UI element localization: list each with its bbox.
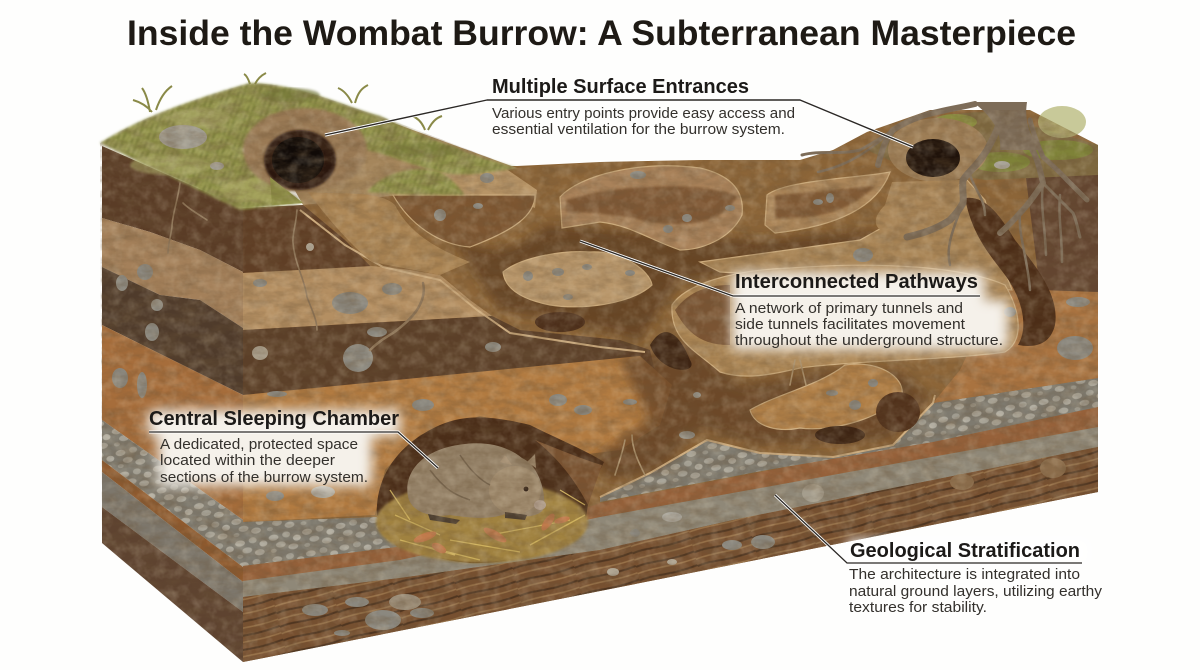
description: sections of the burrow system. (160, 469, 368, 486)
slab F (750, 364, 902, 429)
callout: interconnected pathways (580, 241, 1008, 350)
chamber cavity (377, 417, 604, 563)
front face soil layers (243, 110, 1098, 662)
description: The architecture is integrated into (849, 566, 1080, 583)
pale ridge lines along tunnel walls (300, 210, 935, 497)
slab B (560, 166, 742, 250)
description: essential ventilation for the burrow system. (492, 121, 785, 138)
description: textures for stability. (849, 599, 987, 616)
heading: Multiple Surface Entrances (492, 76, 749, 98)
description: natural ground layers, utilizing earthy (849, 583, 1103, 600)
right deep tunnel (965, 198, 1056, 346)
slope below right entrance (876, 180, 962, 238)
description: A dedicated, protected space (160, 436, 358, 453)
tree roots (802, 102, 1087, 290)
pebbles and stones (112, 125, 1093, 636)
illustration: burrow cross-section block (100, 73, 1100, 665)
leader line (775, 495, 1082, 563)
slab C (765, 172, 890, 233)
heading: Geological Stratification (850, 540, 1080, 562)
description: A network of primary tunnels and (735, 300, 963, 317)
right surface with tree roots and entrance (802, 102, 1098, 290)
callout: multiple surface entrances (325, 76, 913, 147)
description: side tunnels facilitates movement (735, 316, 966, 333)
grass-covered surface (100, 73, 517, 210)
texture overlay (100, 80, 1100, 665)
leader line (149, 432, 438, 468)
dark cavern shadows between tunnels (450, 225, 930, 480)
tan lip of slab A (380, 167, 537, 208)
rock slabs and pathways (308, 166, 1018, 444)
thin roots in soil (168, 183, 806, 475)
small dark burrow holes (650, 332, 692, 370)
central sleeping chamber (376, 417, 604, 563)
leaves (412, 512, 571, 555)
description: Various entry points provide easy access and (492, 105, 795, 122)
slab A (393, 195, 535, 247)
title: Inside the Wombat Burrow: A Subterranean Masterpiece (127, 14, 1076, 53)
grass and fern patches (867, 112, 1098, 180)
slab E: large tunnel island (672, 265, 1018, 376)
leader lines (325, 100, 913, 147)
description: throughout the underground structure. (735, 332, 1003, 349)
right entrance hole (906, 139, 960, 177)
heading: Interconnected Pathways (735, 271, 978, 293)
left face soil layers (102, 146, 243, 662)
slope below left entrance (308, 192, 470, 275)
leader line (580, 241, 980, 296)
callout: geological stratification (775, 495, 1103, 616)
heading: Central Sleeping Chamber (149, 408, 399, 430)
icon: left surface entrance hole (243, 108, 367, 205)
pale ledge and ridge at right (700, 180, 1012, 290)
label glow (848, 540, 1088, 564)
label glow (148, 410, 400, 486)
slab D (503, 252, 652, 307)
label glow (732, 272, 1008, 350)
callout: central sleeping chamber (148, 408, 438, 486)
nest of straw (376, 481, 588, 563)
description: located within the deeper (160, 452, 335, 469)
wombat (407, 443, 546, 524)
